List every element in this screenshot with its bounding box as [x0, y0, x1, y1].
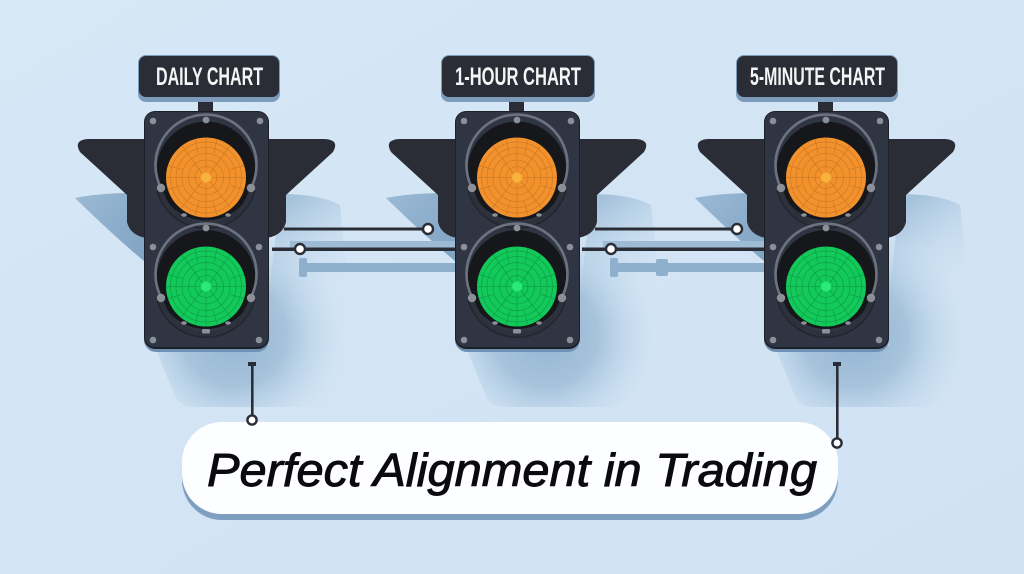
- sign: daily chart: DAILY CHART: [156, 63, 263, 91]
- sign: 1-hour chart: 1-HOUR CHART: [455, 63, 581, 91]
- traffic light: daily chart: [78, 55, 335, 352]
- traffic light: 1-hour chart: [389, 55, 646, 352]
- sign: 5-minute chart: [736, 55, 898, 102]
- title: Perfect Alignment in Trading: [207, 444, 817, 496]
- connector: 1-hour to 5-minute: [582, 224, 766, 254]
- title pill: [182, 422, 838, 520]
- sign: 5-minute chart: 5-MINUTE CHART: [750, 63, 885, 91]
- connector shadows: [290, 241, 765, 277]
- sign: 1-hour chart: [441, 55, 595, 102]
- connector: daily to 1-hour: [272, 224, 458, 254]
- cast shadows of the traffic lights: [75, 193, 980, 407]
- drop line right: [832, 362, 842, 448]
- traffic light: 5-minute chart: [698, 55, 955, 352]
- sign: daily chart: [138, 55, 280, 102]
- drop line left: [247, 362, 257, 425]
